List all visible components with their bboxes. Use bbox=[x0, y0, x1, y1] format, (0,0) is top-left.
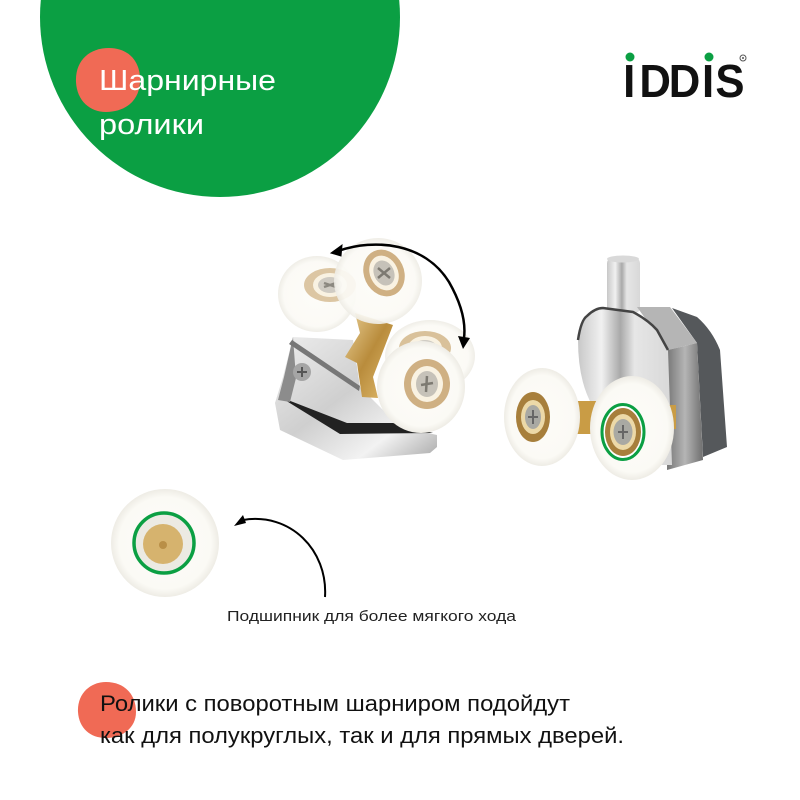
description text: Ролики с поворотным шарниром подойдут bbox=[100, 691, 570, 716]
green header circle bbox=[40, 0, 400, 197]
photo: roller with swivel joint, showing rotation bbox=[275, 238, 475, 460]
left roller bbox=[504, 368, 580, 466]
roller position lower front bbox=[377, 341, 465, 433]
back plate bbox=[672, 308, 727, 457]
brass axle bbox=[576, 401, 602, 434]
roller position upper left bbox=[278, 256, 356, 332]
arrow: swivel rotation bbox=[331, 245, 470, 349]
bracket front bbox=[578, 308, 672, 465]
logo: IDDIS: IDDIS bbox=[623, 55, 744, 107]
photo: roller with bearing, rear view bbox=[111, 489, 219, 597]
photo: roller assembly on chrome bracket bbox=[504, 256, 727, 480]
title bbox=[99, 65, 276, 141]
bracket top side bbox=[637, 307, 697, 350]
roller position upper right bbox=[334, 238, 422, 324]
title: ролики bbox=[99, 109, 204, 141]
coral accent blob: title bbox=[76, 48, 140, 112]
description text bbox=[100, 691, 624, 748]
pin bbox=[607, 258, 640, 313]
right roller bbox=[590, 376, 674, 480]
coral accent blob: description bbox=[78, 682, 136, 738]
roller position lower back bbox=[385, 320, 475, 392]
description text: как для полукруглых, так и для прямых дверей. bbox=[100, 723, 624, 748]
title: Шарнирные bbox=[99, 65, 276, 97]
arrow: bearing callout bbox=[234, 515, 325, 597]
chrome base bbox=[275, 337, 437, 460]
brass arm bbox=[345, 313, 393, 398]
bearing caption: Подшипник для более мягкого хода bbox=[227, 608, 517, 625]
bracket side bbox=[667, 343, 703, 470]
